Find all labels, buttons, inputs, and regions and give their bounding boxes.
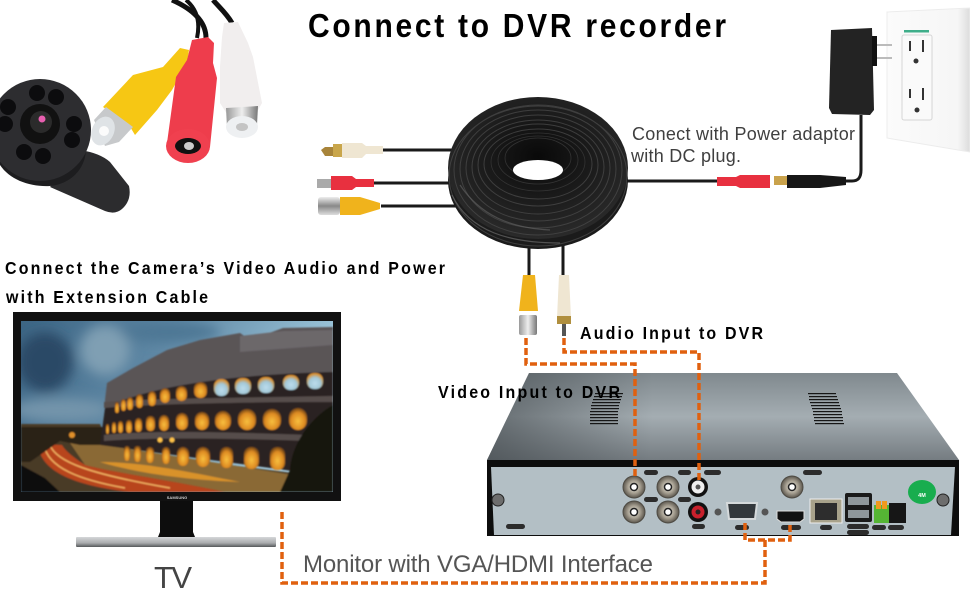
middle row arches — [106, 408, 307, 434]
white RCA plug — [321, 143, 383, 158]
cables above connectors — [172, 0, 232, 38]
coil centre hole — [513, 160, 563, 180]
TV monitor — [10, 312, 341, 547]
road — [38, 444, 225, 492]
text: camera connection: Connect the Camera’s Video Audio and Power — [5, 258, 445, 278]
top row arches — [115, 382, 207, 413]
street lamps — [158, 438, 162, 442]
brand: SAMSUNG — [167, 495, 187, 500]
screws — [492, 494, 504, 506]
HDMI port — [777, 511, 804, 522]
text: audio input: Audio Input to DVR — [580, 323, 763, 343]
coiled extension cable — [374, 97, 628, 276]
text: power adaptor: Conect with Power adaptor — [632, 124, 855, 144]
top vents — [590, 393, 844, 424]
red connector — [166, 37, 217, 163]
text: power adaptor: with DC plug. — [630, 146, 741, 166]
text: TV label: TV — [154, 560, 192, 595]
yellow BNC plug — [318, 197, 380, 215]
cord — [842, 115, 861, 181]
camera clip — [50, 150, 130, 213]
black DC plug — [774, 176, 787, 185]
camera body — [0, 79, 91, 186]
prongs — [874, 44, 892, 46]
wall plate — [887, 8, 970, 152]
town — [21, 427, 105, 462]
USB ports — [845, 493, 872, 522]
DVR recorder — [487, 373, 959, 536]
adapter body — [829, 28, 874, 115]
text: monitor interface: Monitor with VGA/HDMI Interface — [303, 551, 653, 578]
RCA A-IN — [688, 502, 708, 522]
green terminal — [874, 501, 889, 523]
DC 12V socket — [889, 503, 906, 523]
RCA A-OUT — [688, 477, 708, 497]
video line — [526, 338, 635, 478]
monitor stand neck — [158, 501, 195, 537]
VGA port — [714, 503, 768, 519]
monitor base — [76, 537, 276, 547]
cable from coil — [627, 180, 718, 182]
trees — [280, 405, 333, 492]
LAN port — [810, 499, 842, 523]
audio line — [564, 338, 699, 482]
yellow connector — [87, 48, 189, 149]
ground — [21, 423, 290, 492]
photo: camera with cable connectors — [0, 0, 262, 213]
coliseum upper wall — [104, 326, 333, 402]
white connector — [220, 22, 262, 138]
text: power adaptor — [630, 124, 855, 166]
text: camera connection: with Extension Cable — [5, 287, 208, 307]
red DC plug — [317, 176, 374, 190]
rear panel — [487, 460, 959, 536]
monitor picture — [10, 321, 333, 492]
bottom row arches — [124, 446, 285, 470]
title: Connect to DVR recorder — [308, 7, 726, 44]
monitor line — [282, 510, 790, 583]
lower white RCA plug — [557, 275, 571, 336]
lower yellow BNC plug — [519, 275, 538, 335]
BNC connectors — [623, 476, 803, 523]
coliseum lower storeys — [100, 372, 333, 478]
cable leads — [374, 150, 563, 276]
red socket — [717, 175, 770, 188]
port labels — [506, 470, 904, 535]
QC sticker: 4M — [918, 493, 926, 499]
orange dashed connection lines — [282, 338, 790, 583]
text: camera connection — [5, 258, 445, 307]
QC sticker — [908, 480, 936, 504]
text: video input: Video Input to DVR — [438, 382, 620, 402]
power adapter, cable and wall outlet — [627, 8, 970, 188]
